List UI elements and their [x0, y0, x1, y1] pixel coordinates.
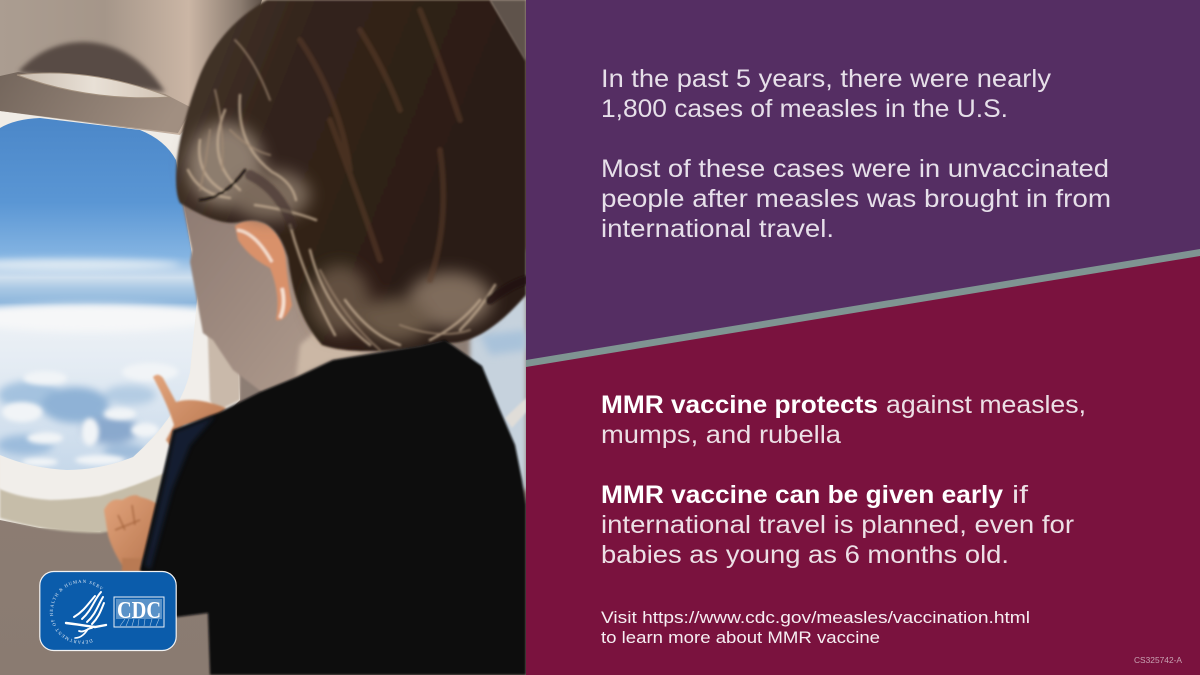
ear: [235, 220, 292, 320]
text block: learn more link: Visit https://www.cdc.gov/measles/vaccination.html: [601, 608, 1030, 627]
panel: purple statistics: [526, 0, 1200, 364]
maroon background: [526, 252, 1200, 675]
shade lip: [0, 72, 192, 133]
lower beige window band: [0, 473, 164, 534]
shadow dome over the lamp: [18, 42, 165, 92]
text block: given early: MMR vaccine can be given early: [601, 481, 1003, 509]
sky and clouds through the window: [0, 112, 210, 472]
text block: given early: if: [1012, 481, 1028, 509]
overhead window shade: [0, 0, 262, 135]
text block: unvaccinated cases: [601, 155, 1111, 243]
hair highlights: [188, 10, 526, 350]
text block: unvaccinated cases: people after measles was brought in from: [601, 185, 1111, 213]
logo background: [40, 572, 176, 650]
upper-right cabin corner: [490, 0, 526, 62]
document code: CS325742-A: [1134, 656, 1183, 665]
white window frame: [0, 470, 164, 501]
lamp lens: [17, 73, 170, 98]
text block: given early: international travel is planned, even for: [601, 511, 1074, 539]
text block: given early: [601, 481, 1074, 569]
diagonal divider band: [526, 249, 1200, 367]
window surround: [0, 108, 240, 532]
hair tones: [187, 123, 492, 342]
text block: unvaccinated cases: international travel.: [601, 215, 834, 243]
heading text: measles cases: 1,800 cases of measles in the U.S.: [601, 95, 1008, 123]
pointing hand: [153, 375, 226, 448]
text block: unvaccinated cases: Most of these cases were in unvaccinated: [601, 155, 1109, 183]
inner reveal beside face: [206, 336, 241, 408]
text block: MMR protects: mumps, and rubella: [601, 421, 841, 449]
HHS eagle: [66, 592, 106, 638]
CDC wordmark: CDC: [117, 598, 161, 624]
heading text: measles cases: [601, 65, 1052, 123]
text block: MMR protects: MMR vaccine protects: [601, 391, 878, 419]
right side window strip: [470, 250, 526, 490]
CDC logo box: [114, 597, 164, 627]
shirt sleeve highlight: [145, 416, 215, 570]
panel: maroon vaccine information: [526, 252, 1200, 675]
lower hand on the window sill: [103, 494, 156, 571]
text block: MMR protects: against measles,: [886, 391, 1086, 419]
dark shirt: [140, 340, 526, 675]
text block: learn more link: [601, 608, 1030, 647]
purple background: [526, 0, 1200, 364]
logo: HHS and CDC badge: [39, 570, 177, 652]
text block: given early: babies as young as 6 months old.: [601, 541, 1009, 569]
cabin wall: [0, 0, 526, 675]
neck and face: [181, 204, 312, 392]
photo: toddler looking out an airplane window: [0, 0, 526, 675]
heading text: measles cases: In the past 5 years, there were nearly: [601, 65, 1052, 93]
hair: [176, 0, 526, 351]
HHS seal ring text: DEPARTMENT OF HEALTH & HUMAN SERVICES USA: [50, 580, 104, 644]
text block: learn more link: to learn more about MMR vaccine: [601, 628, 880, 647]
text block: MMR protects: [601, 391, 1086, 449]
bright neck: [295, 333, 388, 376]
